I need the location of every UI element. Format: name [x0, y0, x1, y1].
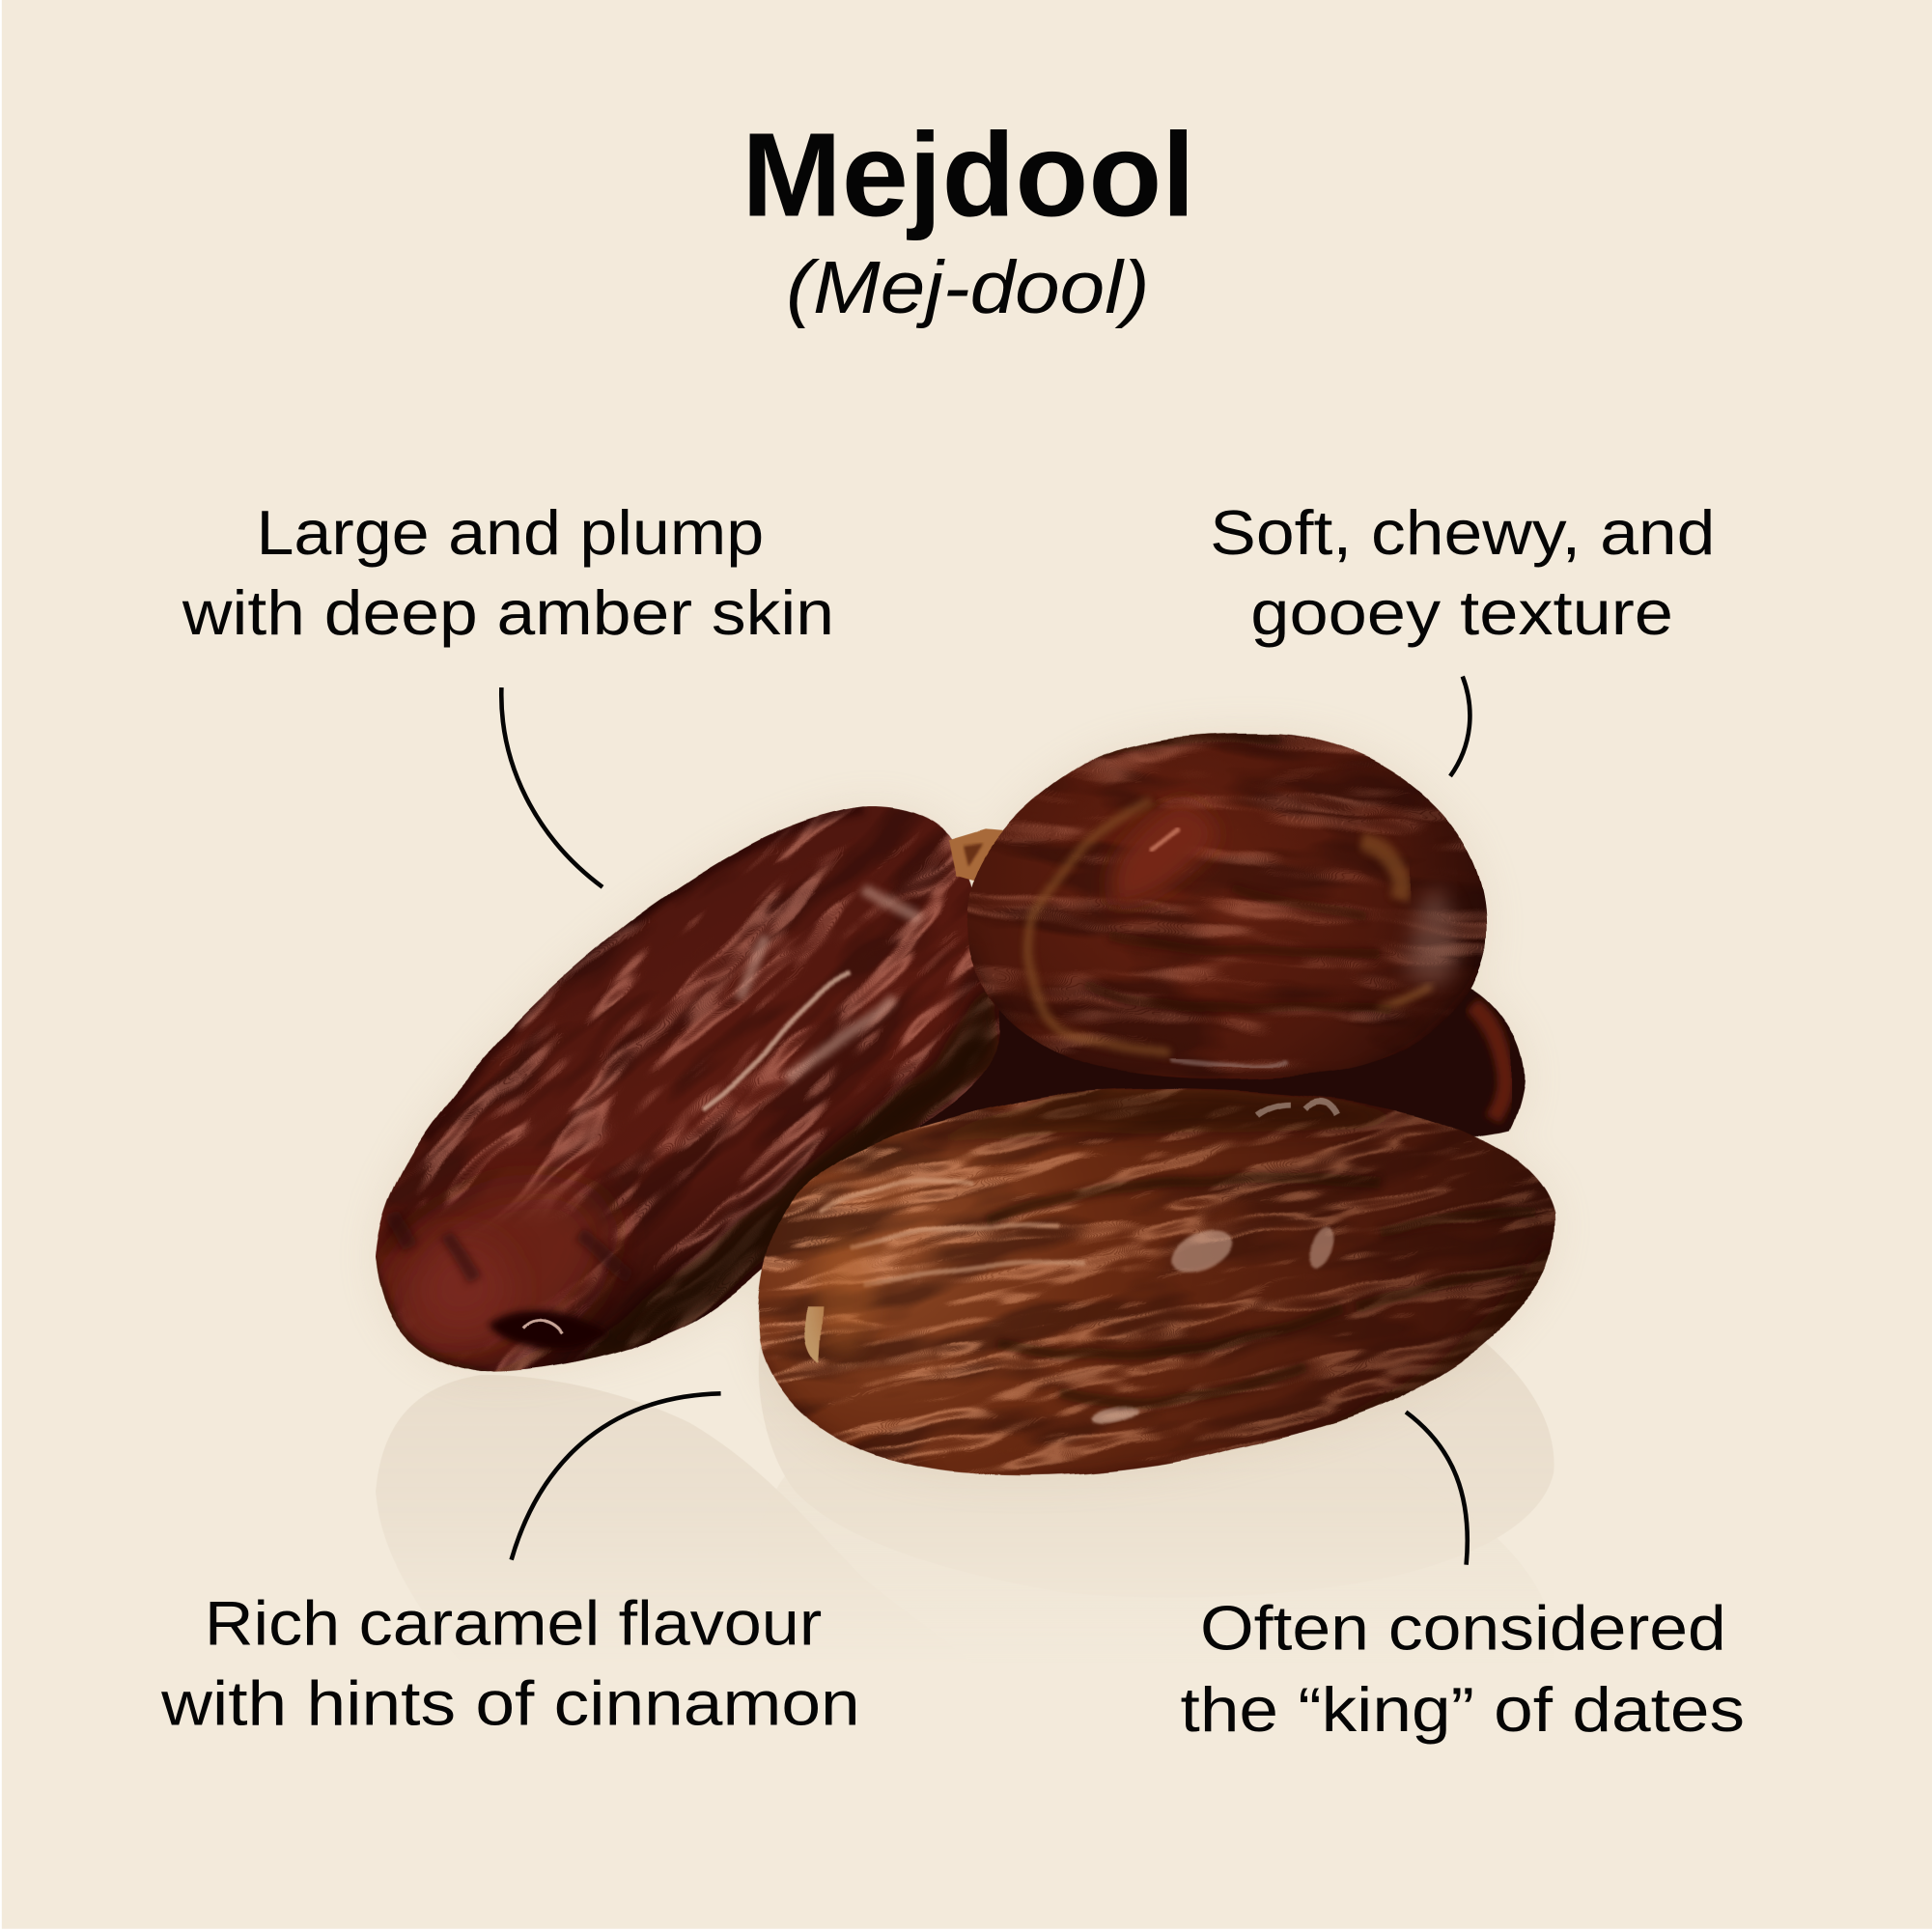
date reflection on surface: [376, 1343, 1554, 1560]
arrow: to caramel flavour: [512, 1393, 721, 1560]
date illustration: pile of dates: [376, 732, 1556, 1475]
callout text: soft and chewy: gooey texture: [1250, 577, 1673, 648]
date: left large: [376, 806, 1000, 1373]
left edge line: [0, 0, 2, 1931]
arrow: to large and plump: [501, 687, 602, 887]
callout text: caramel flavour: Rich caramel flavour: [205, 1588, 822, 1659]
callout text: large and plump: with deep amber skin: [182, 577, 834, 648]
callout text: king of dates: [1181, 1593, 1745, 1745]
arrow: to king of dates: [1406, 1412, 1468, 1565]
callout text: caramel flavour: [160, 1588, 860, 1739]
date: back right: [915, 989, 1526, 1137]
callout text: soft and chewy: [1210, 497, 1715, 648]
pronunciation subtitle: (Mej-dool): [786, 247, 1150, 329]
arrow: to soft and chewy: [1450, 677, 1470, 776]
title: Mejdool: [742, 108, 1195, 241]
callout text: king of dates: the “king” of dates: [1181, 1674, 1745, 1745]
date: front wrinkled: [758, 1088, 1556, 1475]
soft shadow around dates: [376, 734, 1554, 1476]
callout text: soft and chewy: Soft, chewy, and: [1210, 497, 1715, 568]
callout text: large and plump: [182, 497, 834, 648]
date: stem cap: [949, 829, 1013, 881]
callout text: caramel flavour: with hints of cinnamon: [160, 1668, 860, 1739]
date: top round: [967, 732, 1487, 1079]
bottom edge line: [0, 1929, 1932, 1931]
callout text: large and plump: Large and plump: [256, 497, 764, 568]
callout text: king of dates: Often considered: [1200, 1593, 1726, 1664]
